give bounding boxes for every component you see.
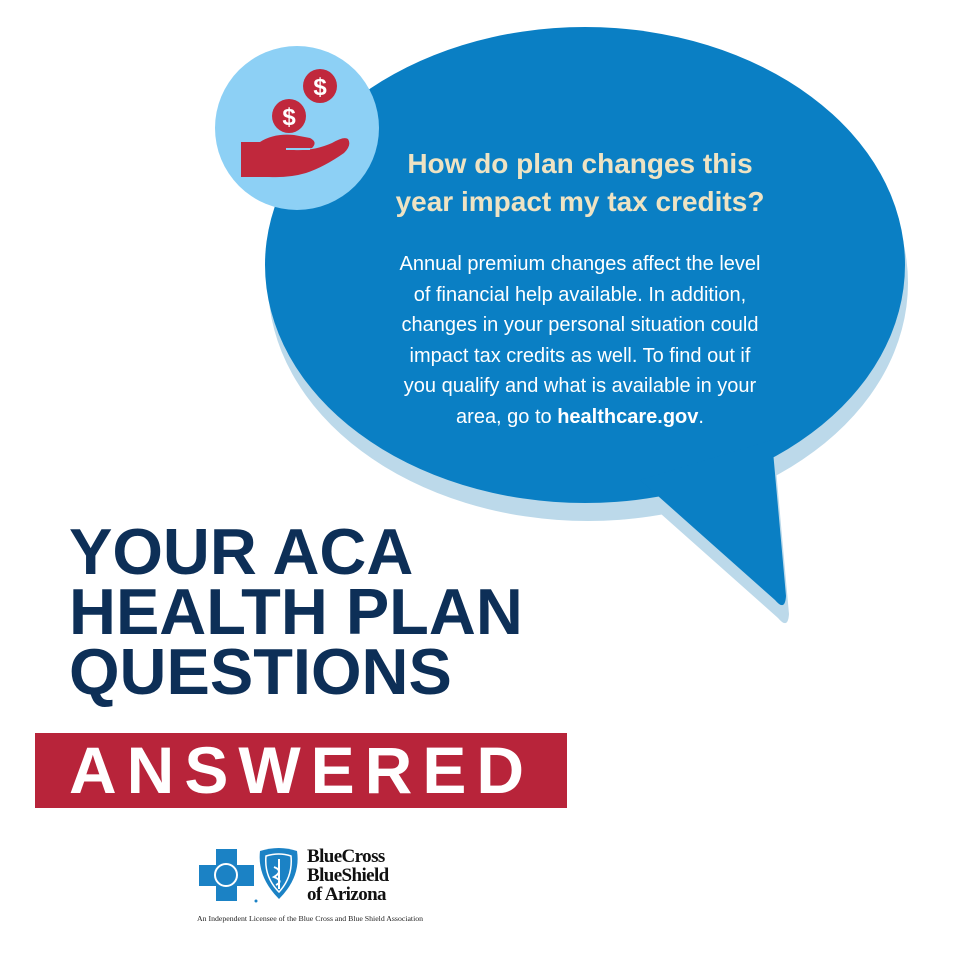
answer text: impact tax credits as well. To find out if bbox=[410, 344, 750, 366]
main title: YOUR ACA bbox=[69, 515, 413, 588]
answered banner: ANSWERED bbox=[69, 733, 534, 807]
bubble shadow bbox=[268, 45, 908, 623]
logo text bbox=[307, 846, 389, 905]
logo: BCBS Arizona bbox=[197, 846, 423, 923]
icon: blue cross bbox=[199, 849, 258, 902]
answer text: of financial help available. In addition, bbox=[414, 284, 746, 306]
answer text: Annual premium changes affect the level bbox=[400, 253, 760, 275]
question heading bbox=[396, 148, 764, 217]
logo text: BlueCross bbox=[307, 846, 385, 867]
answer text: area, go to healthcare.gov. bbox=[456, 406, 704, 428]
main title bbox=[69, 515, 523, 708]
answer text: changes in your personal situation could bbox=[402, 314, 758, 336]
icon: blue shield bbox=[260, 848, 298, 899]
logo text: of Arizona bbox=[307, 884, 386, 905]
bubble body bbox=[265, 27, 905, 605]
question heading: How do plan changes this bbox=[407, 148, 753, 179]
answer text: you qualify and what is available in your bbox=[404, 375, 756, 397]
question heading: year impact my tax credits? bbox=[396, 186, 764, 217]
icon: hand with coins bbox=[215, 46, 379, 210]
licensee line: An Independent Licensee of the Blue Cross and Blue Shield Association bbox=[197, 914, 423, 923]
icon: hand with coins: $ bbox=[282, 104, 296, 131]
logo text: BlueShield bbox=[307, 865, 389, 886]
main title: HEALTH PLAN bbox=[69, 575, 523, 648]
main title: QUESTIONS bbox=[69, 635, 452, 708]
answer text bbox=[400, 253, 760, 428]
icon: hand with coins: $ bbox=[313, 74, 327, 101]
